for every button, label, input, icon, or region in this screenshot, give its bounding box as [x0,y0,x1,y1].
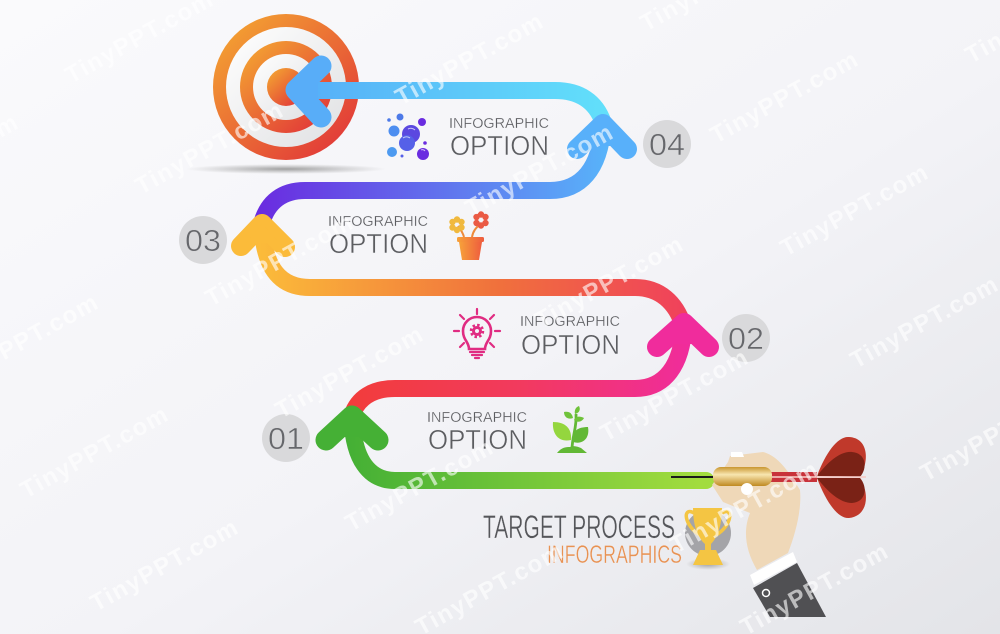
title text: INFOGRAPHICS [547,541,682,569]
title text [483,509,682,569]
path segment 2 to 3: orange arrow [241,224,683,325]
option text 1: OPTION [428,424,527,455]
barrel [713,467,772,486]
step number 03 [179,216,227,264]
path segment 1 to 2: red-pink arrow [352,323,709,415]
option text 4: INFOGRAPHIC [449,115,549,132]
option text 2 [520,313,620,360]
title text: TARGET PROCESS [483,509,675,545]
cuff [750,552,797,585]
option text 4: OPTION [450,130,549,161]
target board [186,14,386,174]
sleeve [753,563,826,617]
icon: trophy [685,508,731,570]
option text 2: INFOGRAPHIC [520,313,620,330]
option text 3: INFOGRAPHIC [328,213,428,230]
watermarks: TinyPPT.com [846,270,1000,374]
option text 1: INFOGRAPHIC [427,409,527,426]
step number 02 [722,314,770,362]
hand [712,452,800,570]
icon: sprout [553,406,588,453]
fletching [817,437,866,518]
watermarks: TinyPPT.com [666,455,824,559]
path segment 4 to target: blue arrow [295,66,603,122]
step number 01 [262,414,310,462]
icon: bubbles [387,114,429,160]
path segment start to 1: green arrow [326,416,706,480]
watermarks: TinyPPT.com [201,208,359,312]
option text 3: OPTION [329,228,428,259]
watermarks: TinyPPT.com [596,343,754,447]
path segment 3 to 4: purple-blue arrow [262,124,627,222]
watermarks: TinyPPT.com [706,45,864,149]
watermarks: TinyPPT.com [531,230,689,334]
shaft [770,472,817,482]
watermarks: TinyPPT.com [131,96,289,200]
watermarks: TinyPPT.com [16,400,174,504]
step number 03: 03 [185,223,221,258]
step number 04: 04 [649,127,685,162]
watermarks: TinyPPT.com [86,513,244,617]
watermarks: TinyPPT.com [271,320,429,424]
option text 3 [328,213,428,259]
option text 2: OPTION [521,329,620,360]
step number 04 [643,120,691,168]
step number 02: 02 [728,321,764,356]
needle [671,476,713,478]
dart and hand [671,437,866,617]
watermarks: TinyPPT.com [776,158,934,262]
option text 1 [427,409,527,455]
option text 4 [449,115,549,161]
watermarks: TinyPPT.com [391,7,549,111]
watermarks: TinyPPT.com [461,118,619,222]
icon: flower pot [449,211,489,260]
icon: light bulb with gear [454,309,500,358]
step number 01: 01 [268,421,304,456]
watermarks: TinyPPT.com [341,433,499,537]
